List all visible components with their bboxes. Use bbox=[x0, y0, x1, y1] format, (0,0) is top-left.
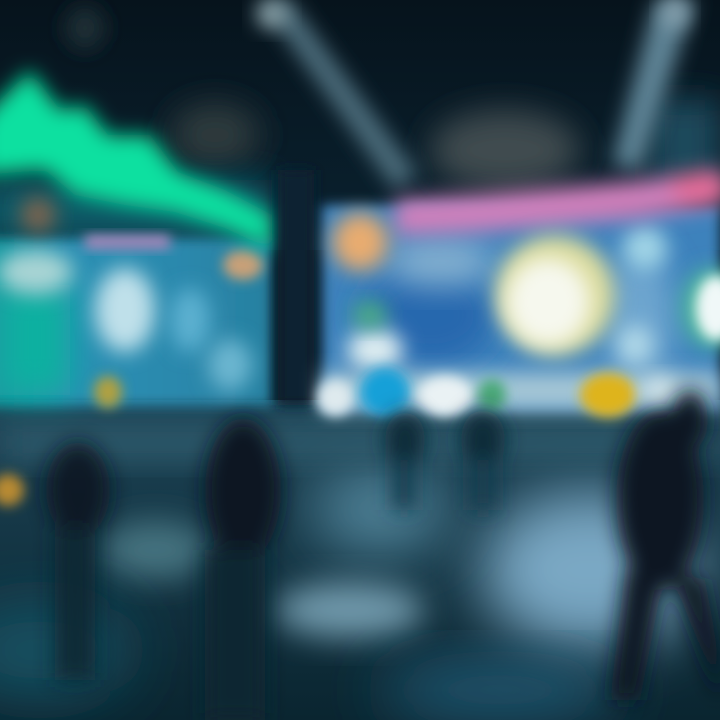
panel: left display wall bbox=[0, 180, 272, 408]
bottom row of coloured shapes bbox=[317, 368, 676, 417]
white circle at right edge bbox=[682, 268, 720, 348]
people silhouettes bbox=[46, 390, 720, 720]
large glowing yellow circle bbox=[495, 235, 615, 355]
person: centre bbox=[385, 412, 425, 510]
panel: right display wall bbox=[322, 205, 720, 410]
pink band bbox=[395, 168, 720, 235]
ceiling light beams bbox=[257, 0, 695, 190]
orange circle bbox=[332, 213, 388, 271]
person: centre right bbox=[461, 410, 505, 510]
floor bbox=[0, 400, 720, 720]
green zigzag sign bbox=[0, 70, 272, 250]
person: right foreground bbox=[610, 390, 720, 700]
ceiling background bbox=[0, 0, 720, 250]
pillar bbox=[278, 170, 314, 405]
small orange light at left bbox=[0, 474, 24, 506]
person: far left bbox=[46, 442, 110, 680]
person: centre left bbox=[205, 418, 281, 720]
